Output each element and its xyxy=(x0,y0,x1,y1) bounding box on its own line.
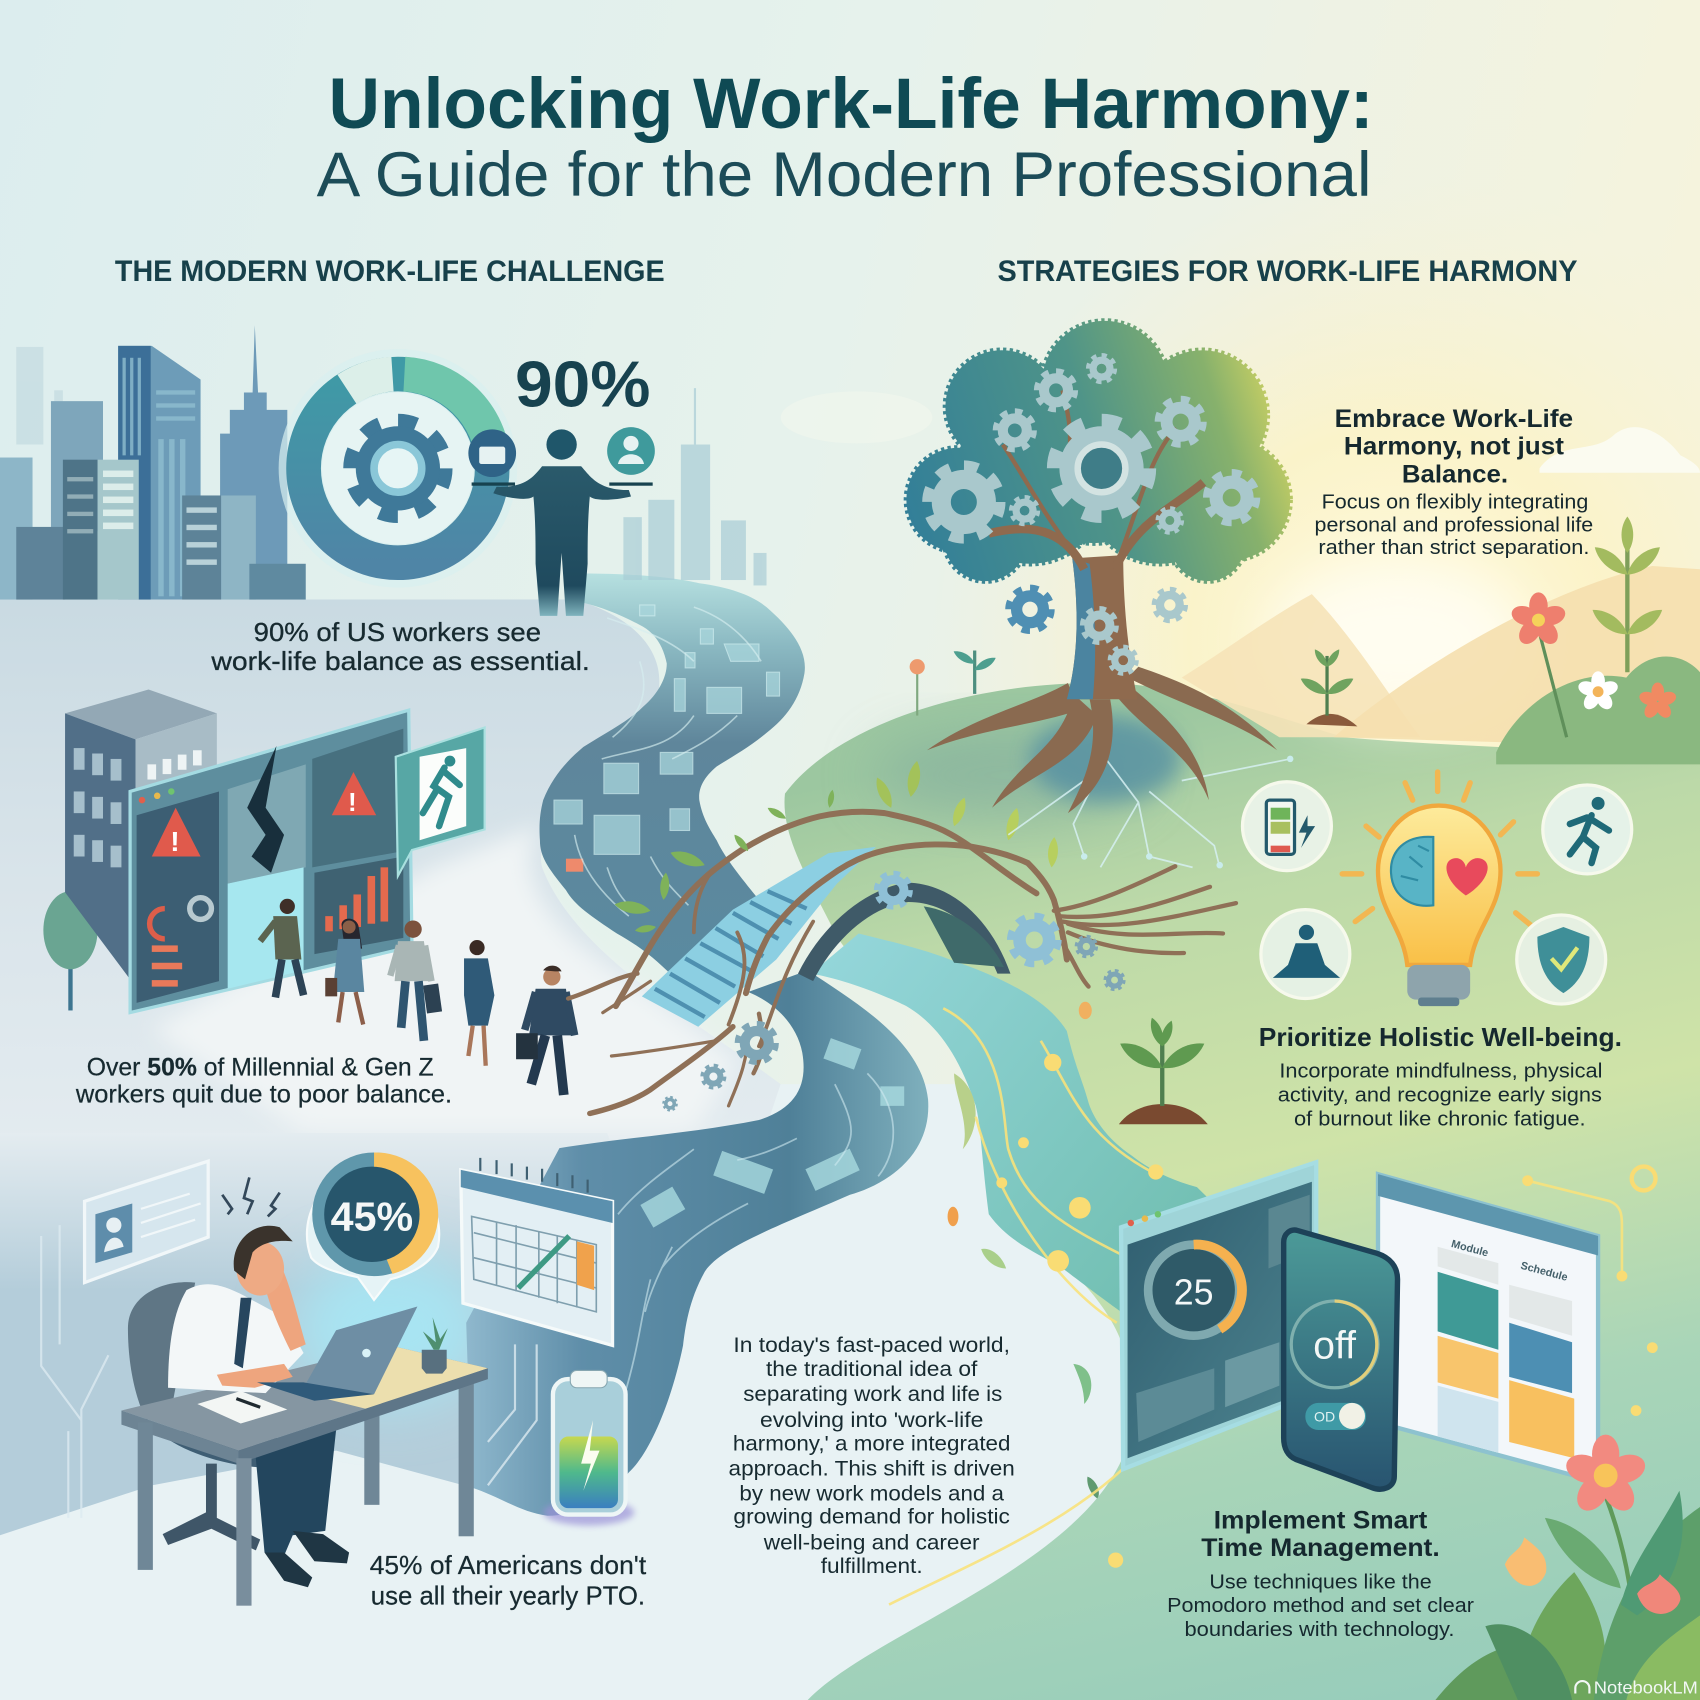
city skyline xyxy=(0,325,767,600)
text: 50 percent: workers quit due to poor balance. xyxy=(75,1081,452,1109)
text: intro paragraph: by new work models and a xyxy=(739,1481,1005,1506)
text: well-being xyxy=(1259,1022,1622,1130)
worker 3 xyxy=(390,920,442,1041)
icon: shield xyxy=(1517,915,1606,1004)
text: time management: Pomodoro method and set clear xyxy=(1167,1594,1474,1617)
exit bubble xyxy=(396,727,485,876)
tree xyxy=(43,891,98,1010)
text: time management: Use techniques like the xyxy=(1209,1570,1432,1593)
tulips xyxy=(1505,1537,1546,1586)
flower xyxy=(1562,1435,1649,1517)
right garden plants xyxy=(1298,517,1678,737)
text: embrace harmony: Embrace Work-Life xyxy=(1335,405,1573,433)
panel: left ground xyxy=(0,600,781,1535)
bridge of branches xyxy=(568,760,1236,1113)
well-being lightbulb and icons xyxy=(1242,772,1632,1006)
bulb xyxy=(1378,806,1501,1006)
underground circuits xyxy=(1008,716,1293,868)
chart: 90 percent scene xyxy=(0,325,767,616)
donut chart xyxy=(279,349,517,588)
battery xyxy=(543,1370,634,1525)
text: 50 percent: Over 50% of Millennial & Gen Z xyxy=(87,1054,434,1082)
road: lower xyxy=(466,970,928,1516)
bottom-right plants xyxy=(1435,1435,1700,1700)
profile window xyxy=(85,1161,208,1283)
sprout xyxy=(1116,1016,1208,1124)
text: well-being: activity, and recognize early signs xyxy=(1278,1084,1602,1107)
worker torso and head xyxy=(168,1226,306,1393)
sapling xyxy=(1298,647,1357,726)
stream xyxy=(811,933,1247,1312)
dashboard screen xyxy=(130,710,412,1013)
illustration: office and quitting workers xyxy=(43,690,575,1095)
text: embrace harmony: Harmony, not just xyxy=(1344,432,1564,460)
building xyxy=(65,690,217,987)
text: intro paragraph: growing demand for holistic xyxy=(733,1503,1010,1528)
stat bubble 45%: 45% xyxy=(331,1194,413,1240)
text: intro paragraph: approach. This shift is driven xyxy=(729,1456,1015,1481)
road: upper xyxy=(540,574,805,976)
text: intro paragraph: In today's fast-paced world, xyxy=(733,1332,1010,1357)
rays xyxy=(1342,772,1537,927)
title: A Guide for the Modern Professional xyxy=(317,140,1371,210)
crown xyxy=(906,321,1290,581)
panel: right land xyxy=(784,683,1700,1700)
chair xyxy=(128,1282,298,1550)
stairs xyxy=(642,847,876,1027)
text: well-being: of burnout like chronic fatigue. xyxy=(1294,1107,1586,1130)
text: 90 percent: work-life balance as essential. xyxy=(210,646,590,676)
text: 45 percent xyxy=(370,1550,647,1611)
phone xyxy=(1284,1230,1398,1489)
text: intro paragraph: well-being and career xyxy=(763,1529,980,1554)
stat: 90%: 90% xyxy=(515,348,651,421)
text: intro paragraph: separating work and life is xyxy=(743,1381,1002,1406)
light trails xyxy=(889,1008,1622,1605)
heading: challenge: THE MODERN WORK-LIFE CHALLENGE xyxy=(115,256,665,288)
dashboard screen: ! xyxy=(170,825,180,857)
branches xyxy=(568,812,1236,1113)
worker 4 xyxy=(464,940,494,1066)
small plants near tree xyxy=(910,648,998,716)
arch xyxy=(798,883,1010,981)
text: 50 percent xyxy=(75,1054,452,1109)
worker 2 xyxy=(325,919,364,1025)
text: well-being: Prioritize Holistic Well-being. xyxy=(1259,1022,1622,1052)
glow dots xyxy=(996,1054,1658,1568)
laptop xyxy=(257,1306,417,1401)
desk xyxy=(121,1345,488,1606)
scenery: sun mountains xyxy=(1182,564,1700,764)
desk back legs xyxy=(364,1382,474,1536)
leaves xyxy=(614,760,1059,934)
text: 90 percent: 90% of US workers see xyxy=(254,617,541,647)
tall plant xyxy=(1589,517,1666,672)
schedule window: Schedule xyxy=(1519,1260,1569,1284)
stress marks xyxy=(222,1177,280,1216)
text: time management: Time Management. xyxy=(1201,1534,1440,1562)
text: intro paragraph xyxy=(729,1332,1015,1578)
person balancing xyxy=(468,427,655,616)
bridge gears xyxy=(663,873,1124,1111)
worker 1 xyxy=(260,899,304,997)
trunk xyxy=(1067,555,1137,699)
phone: off xyxy=(1313,1324,1356,1367)
workers walking xyxy=(260,899,575,1095)
text: intro paragraph: the traditional idea of xyxy=(766,1356,978,1381)
drifting leaves on path xyxy=(948,1002,1099,1498)
watermark: NotebookLM xyxy=(1594,1677,1698,1697)
text: 90 percent xyxy=(210,617,590,676)
text: embrace harmony xyxy=(1315,405,1593,559)
text: intro paragraph: fulfillment. xyxy=(821,1553,923,1578)
timer tablet xyxy=(1121,1162,1316,1469)
roots xyxy=(927,667,1277,813)
illustration: tree with gears xyxy=(906,321,1293,868)
phone: OD xyxy=(1314,1408,1335,1424)
road: document tiles and streaks xyxy=(554,605,780,916)
text: well-being: Incorporate mindfulness, physical xyxy=(1279,1060,1602,1083)
text: 45 percent: 45% of Americans don't xyxy=(370,1550,647,1580)
text: time management: Implement Smart xyxy=(1214,1507,1427,1535)
illustration: burned-out worker xyxy=(41,1152,634,1606)
text: embrace harmony: rather than strict separation. xyxy=(1318,536,1589,559)
gears in crown xyxy=(927,355,1257,674)
text: embrace harmony: personal and professional life xyxy=(1315,513,1593,536)
schedule window xyxy=(1378,1174,1598,1482)
desk plant xyxy=(422,1317,448,1374)
text: 45 percent: use all their yearly PTO. xyxy=(371,1581,645,1611)
road: lower tiles xyxy=(618,1038,904,1399)
text: embrace harmony: Balance. xyxy=(1402,460,1508,488)
calendar xyxy=(461,1158,613,1345)
icon: meditation xyxy=(1261,910,1350,999)
time-management devices xyxy=(1121,1162,1598,1489)
icon: runner xyxy=(1543,785,1632,874)
worker 5 xyxy=(516,966,575,1095)
heading: strategies: STRATEGIES FOR WORK-LIFE HARMONY xyxy=(997,256,1578,288)
worker trousers and shoes xyxy=(255,1430,349,1587)
dashboard screen: ! xyxy=(348,787,357,817)
icon: battery xyxy=(1242,782,1331,871)
title xyxy=(317,64,1374,210)
schedule window: Module xyxy=(1450,1238,1490,1260)
text: intro paragraph: harmony,' a more integrated xyxy=(733,1431,1010,1456)
timer tablet: 25 xyxy=(1174,1272,1214,1312)
title: Unlocking Work-Life Harmony: xyxy=(329,64,1374,144)
text: embrace harmony: Focus on flexibly integrating xyxy=(1322,490,1588,513)
branches xyxy=(989,482,1203,569)
stat bubble 45% xyxy=(307,1152,439,1300)
text: time management xyxy=(1167,1507,1474,1641)
flowers xyxy=(1509,592,1678,737)
text: time management: boundaries with technology. xyxy=(1184,1618,1454,1641)
circuit lines xyxy=(41,1225,537,1518)
text: intro paragraph: evolving into 'work-life xyxy=(760,1407,983,1432)
